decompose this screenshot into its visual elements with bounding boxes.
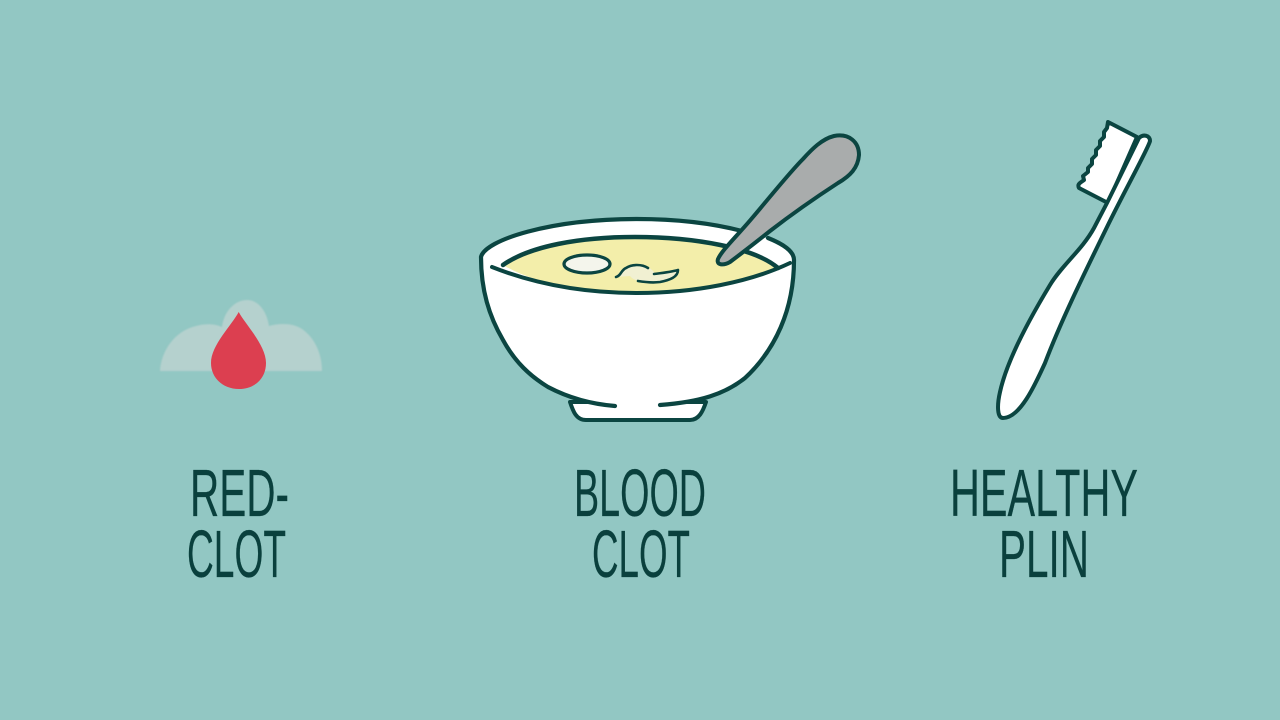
- bowl outline right: [660, 238, 794, 405]
- label: Healthy Plin: PLIN: [999, 517, 1089, 592]
- spoon: [718, 135, 859, 264]
- icon: red drop on cloud: [160, 300, 322, 389]
- label: Red-Clot: CLOT: [187, 517, 286, 592]
- toothbrush head with bristles: [1078, 122, 1137, 203]
- soup dumpling oval: [564, 255, 610, 273]
- label: Red-Clot: [187, 456, 289, 592]
- bowl outline left: [481, 219, 742, 406]
- icon: bowl of soup with spoon: [481, 135, 859, 420]
- white foot join: [618, 401, 657, 411]
- soup lower edge: [492, 263, 790, 293]
- bowl body: [481, 219, 794, 406]
- label: Blood Clot: BLOOD: [574, 456, 706, 531]
- icon: red blood drop: [211, 312, 266, 389]
- label: Healthy Plin: HEALTHY: [950, 456, 1138, 531]
- soup dumpling squiggle: [616, 265, 678, 282]
- label: Red-Clot: RED-: [190, 456, 289, 531]
- icon: pale cloud: [160, 300, 322, 371]
- toothbrush handle: [998, 136, 1150, 418]
- icon: toothbrush: [998, 122, 1150, 418]
- bowl foot: [570, 402, 706, 420]
- label: Healthy Plin: [950, 456, 1138, 592]
- soup upper edge: [503, 237, 778, 268]
- soup surface: [503, 237, 778, 293]
- label: Blood Clot: CLOT: [592, 517, 690, 592]
- label: Blood Clot: [574, 456, 706, 592]
- squiggle line: [616, 265, 678, 282]
